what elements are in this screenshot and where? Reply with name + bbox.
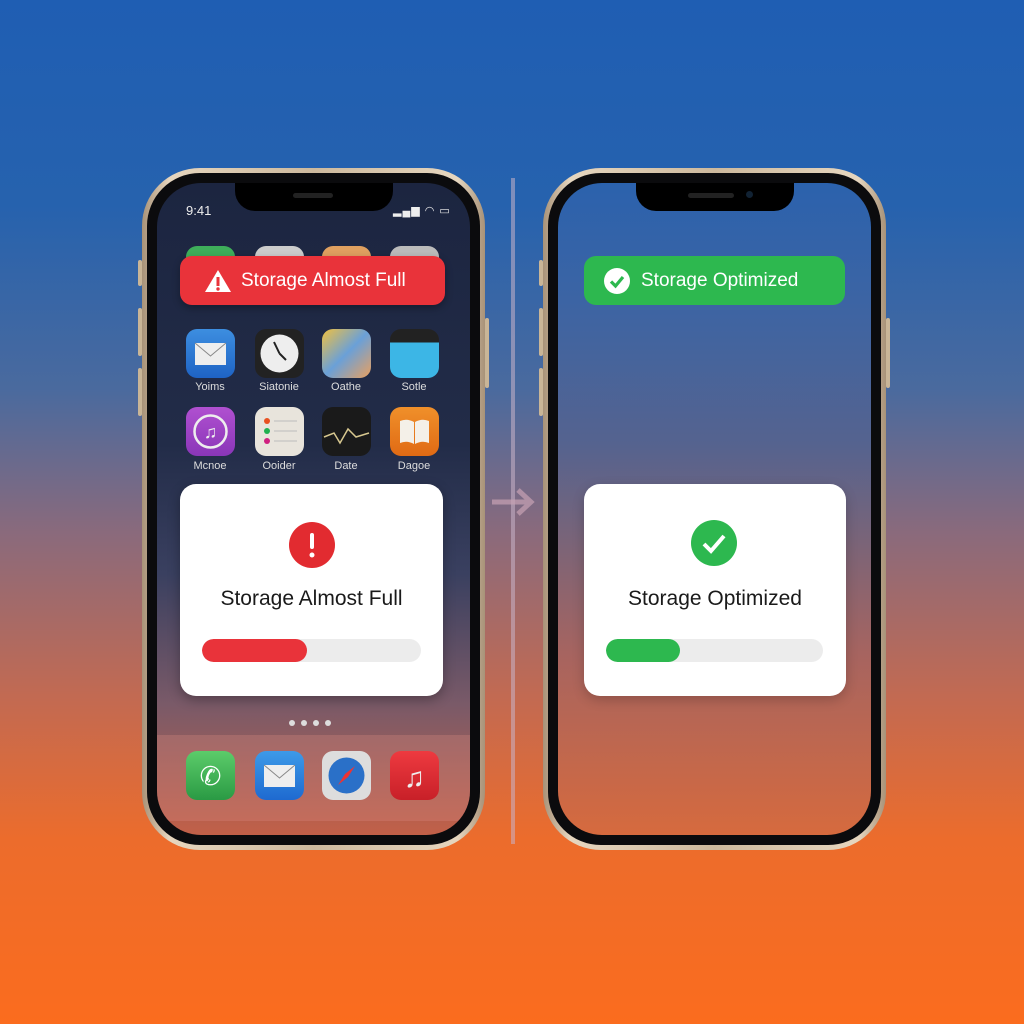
card: storage almost full [180,484,443,696]
banner: storage optimized [584,256,845,305]
app grid row 2 [186,329,235,378]
app grid row 3: ♫ [204,422,217,442]
left phone: storage almost full: Oathe [331,381,361,393]
left phone: storage almost full: Mcnoe [193,460,227,472]
icon: check [691,520,737,566]
left phone: storage almost full: Yoims [195,381,225,393]
status bar: 9:41 [186,203,211,218]
notch [636,183,794,211]
left phone: storage almost full: Siatonie [259,381,299,393]
divider line with arrow [492,178,534,844]
page dots [289,720,331,726]
card: storage almost full: Storage Almost Full [220,587,403,610]
left phone: storage almost full: ▂▄▆ ◠ ▭ [393,205,451,217]
app grid row 3 [186,407,235,456]
left phone: storage almost full [142,168,485,850]
left phone: storage almost full: Ooider [262,460,296,472]
dock: ✆ [200,761,221,791]
dock: ♫ [404,762,425,793]
card: storage optimized [584,484,846,696]
left phone: storage almost full: Dagoe [398,460,430,472]
icon: exclamation [289,522,335,568]
dock [157,735,470,821]
top row icons partially hidden [186,246,235,295]
banner: storage almost full: Storage Almost Full [241,270,406,290]
notch [234,183,392,211]
banner: storage optimized: Storage Optimized [641,270,798,290]
banner: storage almost full [180,256,445,305]
left phone: storage almost full: Date [334,460,358,472]
right phone: storage optimized [543,168,886,850]
card: storage optimized: Storage Optimized [628,587,802,610]
left phone: storage almost full: Sotle [401,381,427,393]
